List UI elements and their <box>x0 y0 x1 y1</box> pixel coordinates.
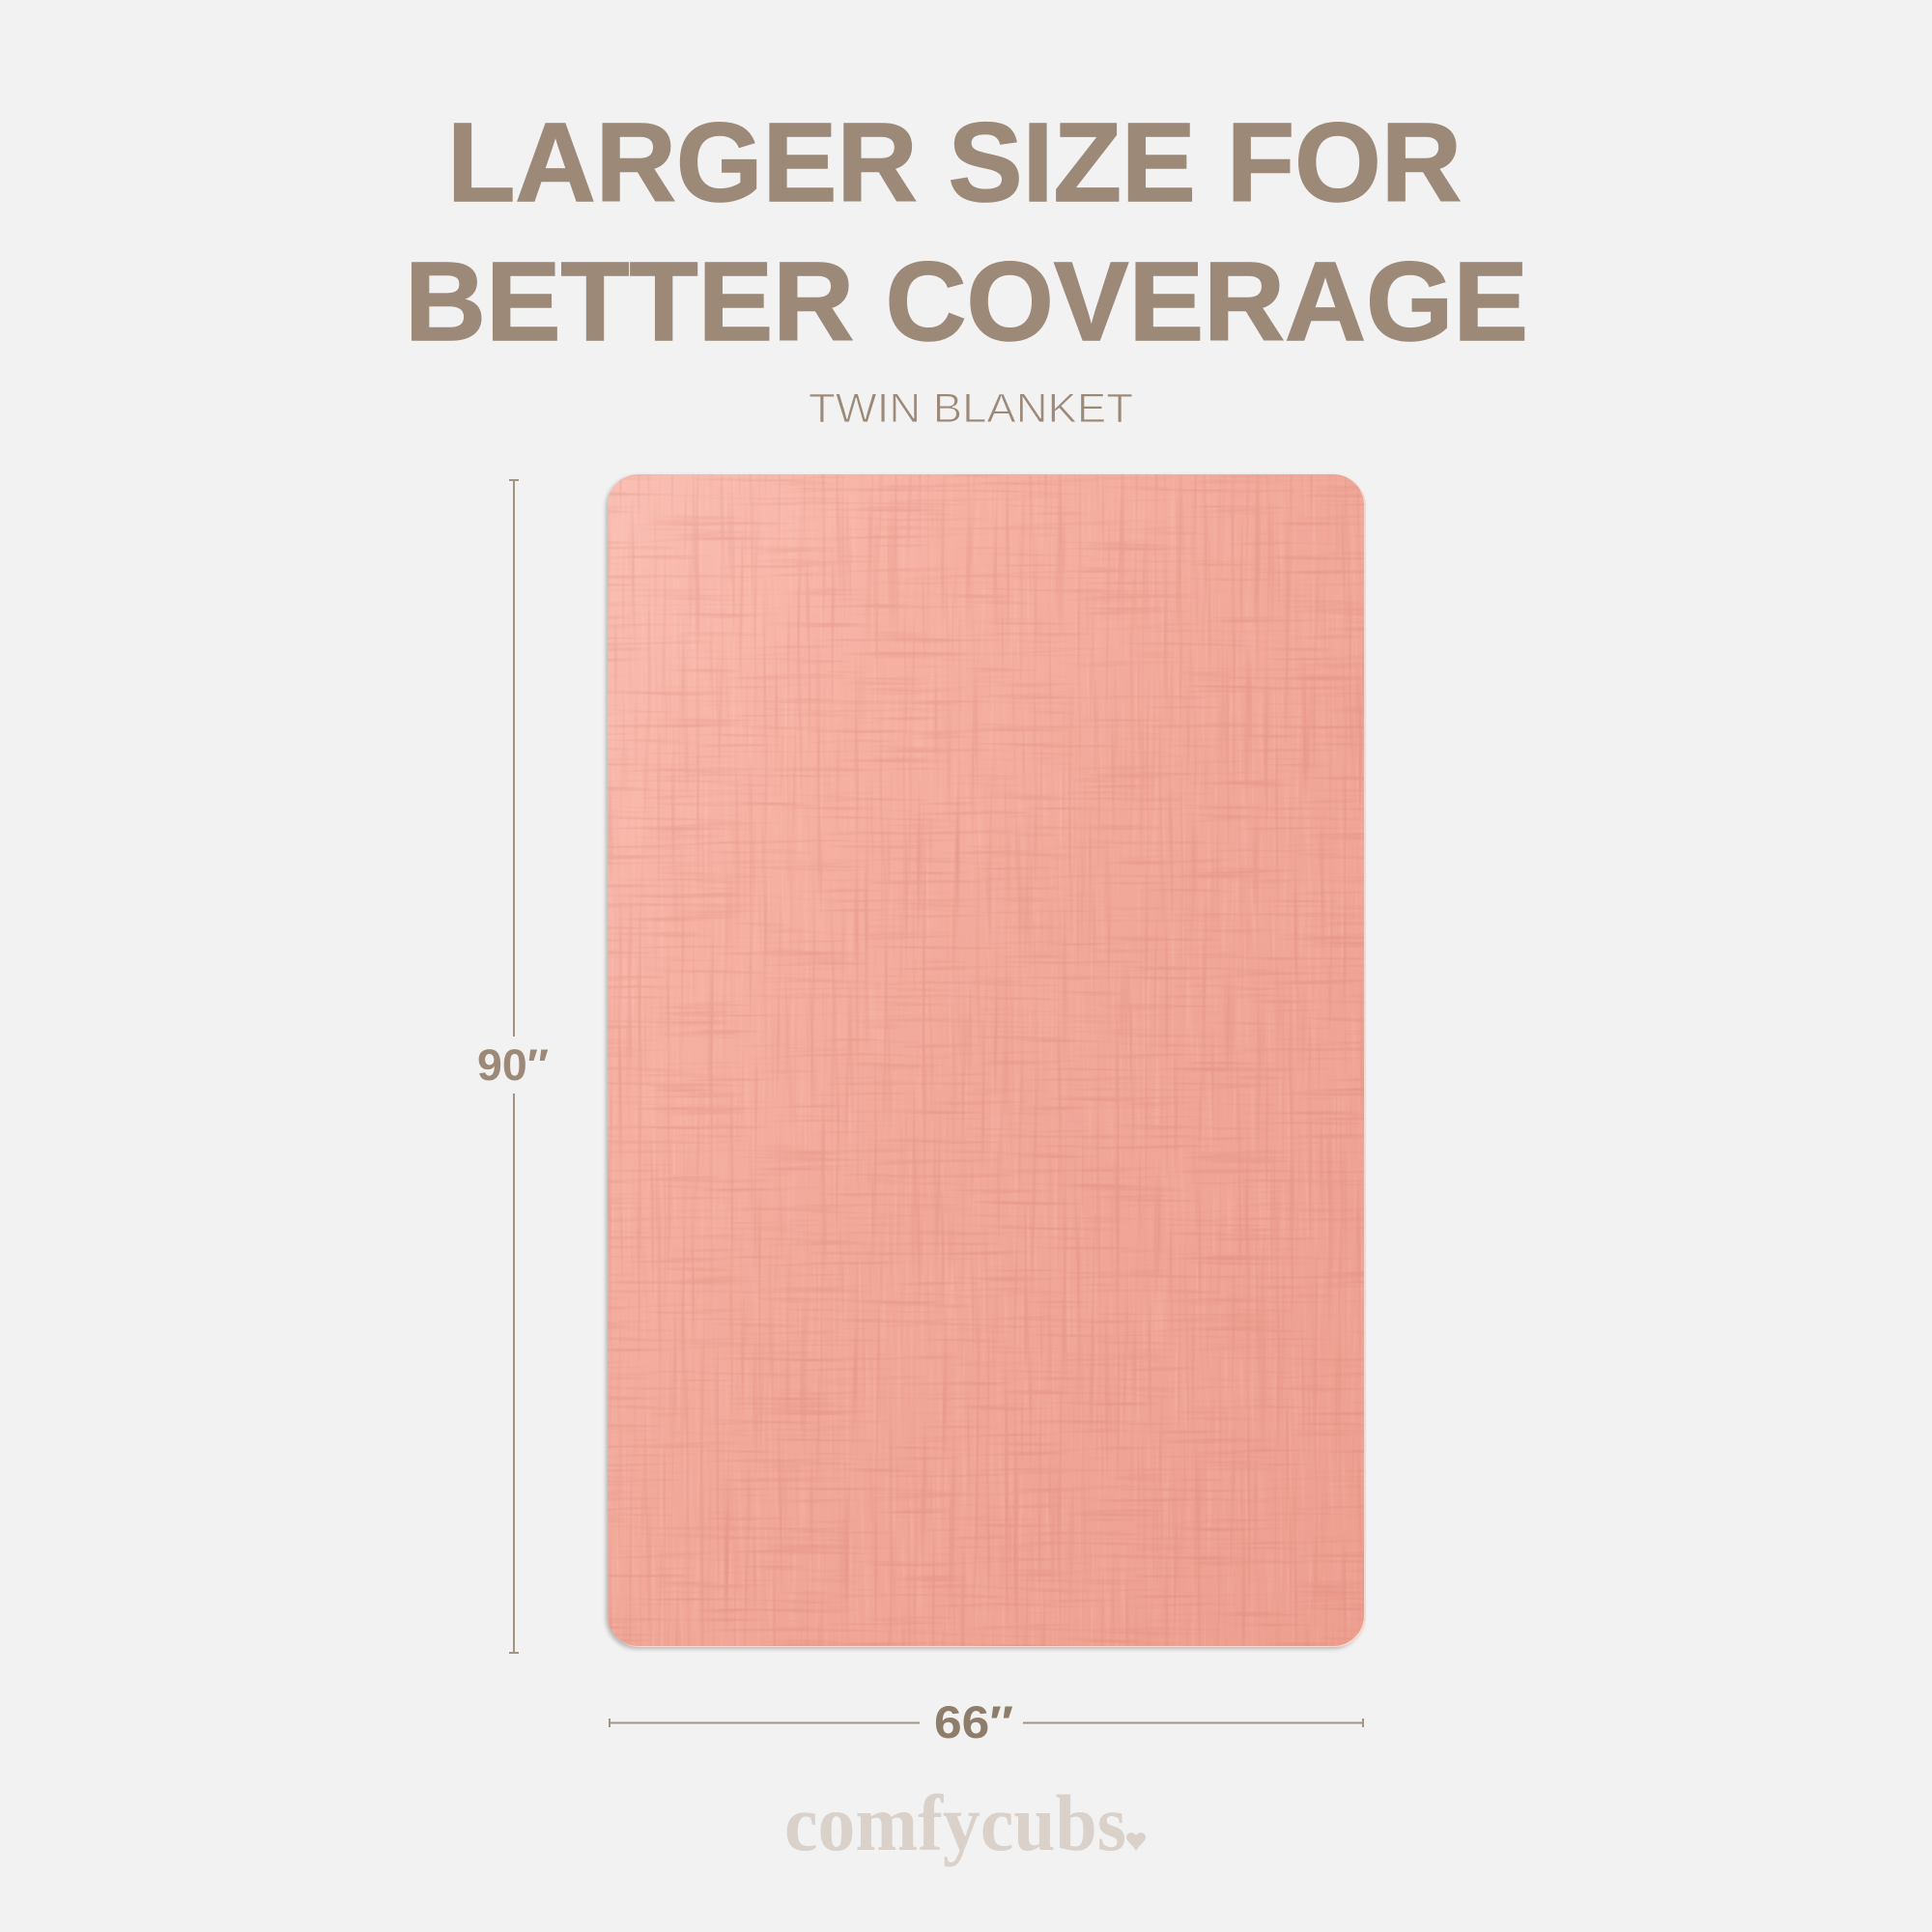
height label: 90″ <box>477 1040 549 1090</box>
width dimension line <box>610 1719 1363 1727</box>
width label: 66″ <box>934 1696 1013 1747</box>
height dimension line <box>509 480 519 1653</box>
logo: comfycubs <box>784 1778 1126 1867</box>
title: LARGER SIZE FOR <box>447 99 1462 225</box>
title: BETTER COVERAGE <box>405 239 1528 364</box>
blanket <box>606 474 1366 1649</box>
subtitle: TWIN BLANKET <box>809 385 1133 432</box>
icon: heart <box>1126 1833 1146 1851</box>
title <box>405 99 1528 364</box>
